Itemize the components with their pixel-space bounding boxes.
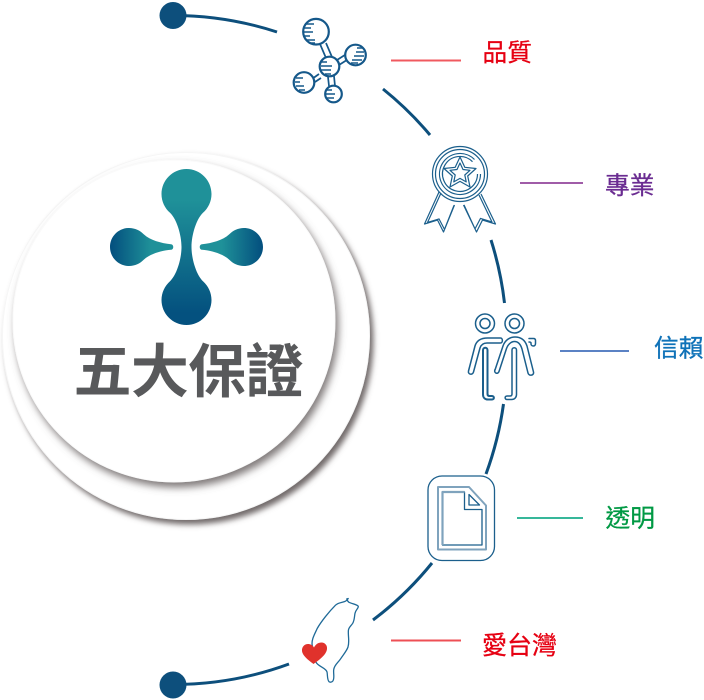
icon: couple <box>468 314 536 400</box>
icon: top dot <box>160 2 186 29</box>
icon: medal <box>424 146 496 232</box>
connector: professional <box>520 182 583 184</box>
label: trust: 信賴 <box>654 334 703 362</box>
label: professional: 專業 <box>605 172 654 200</box>
icon: Taiwan map with heart <box>302 598 358 682</box>
heading: five guarantees: 五大保證 <box>74 340 304 405</box>
icon: molecule <box>294 19 366 102</box>
connector: trust <box>560 350 629 352</box>
label: love Taiwan: 愛台灣 <box>482 632 557 660</box>
icon: bottom dot <box>160 672 186 698</box>
connector: transparency <box>517 517 583 519</box>
icon: logo cross <box>110 169 263 325</box>
label: transparency: 透明 <box>606 504 655 532</box>
panel: back circle <box>2 152 370 520</box>
label: quality: 品質 <box>482 39 532 67</box>
connector: quality <box>391 60 461 62</box>
connector: love Taiwan <box>391 640 461 642</box>
icon: document <box>428 476 494 560</box>
panel: front circle <box>13 160 335 482</box>
arc: timeline curve <box>173 15 504 685</box>
